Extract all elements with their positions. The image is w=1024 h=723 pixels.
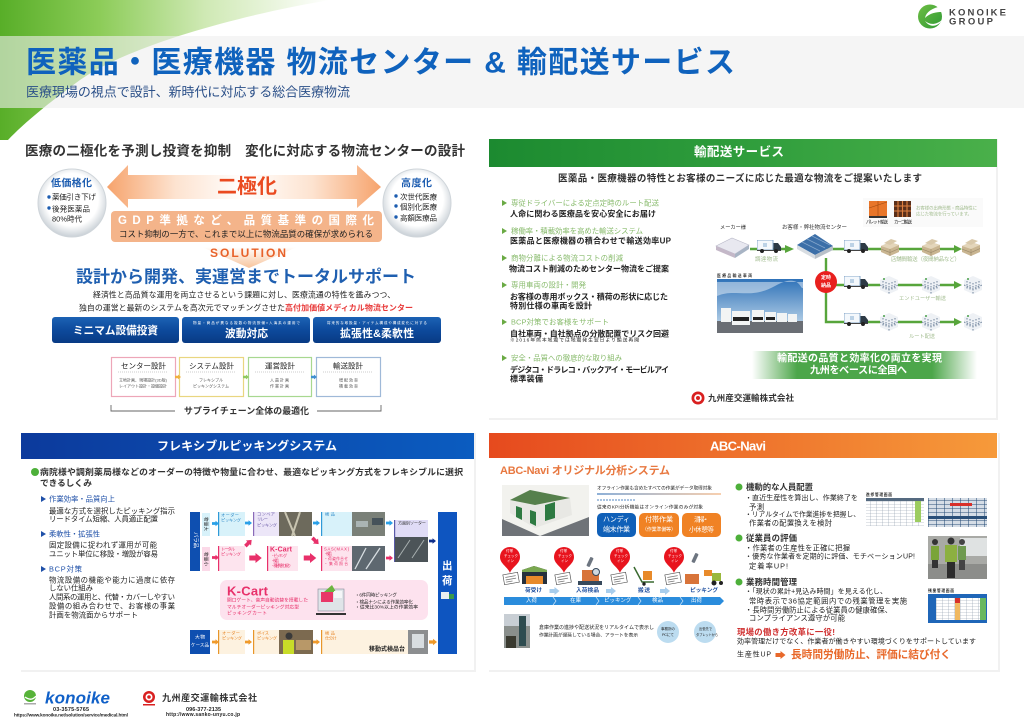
legend: pallet and cargo: 応じた物流を行っています。: [916, 210, 972, 218]
icon: forklift picking: [685, 553, 723, 586]
feature list: flexible staffing: ・直近生産性を算出し、作業終了を: [745, 493, 858, 502]
check-in pins: チェック: [614, 553, 628, 558]
benefit list: ユニット単位に移設・増設が容易: [49, 550, 158, 558]
chart thumbnail: daily progress table: 進捗管理画面: [866, 492, 892, 497]
K-Cart callout: ・検品ナシによる作業効率化: [355, 598, 413, 606]
panel: delivery service: [489, 139, 997, 404]
double arrow: polarization: 二極化: [217, 175, 277, 198]
row: small volume: SAS(MAX): [324, 546, 350, 552]
service list: [502, 198, 672, 384]
service list: 物流コスト削減のためセンター物流をご提案: [509, 264, 669, 274]
flow arrows: [212, 520, 437, 645]
service list: 特別仕様の車両を設計: [510, 300, 592, 310]
card: center design: [112, 358, 176, 396]
panel: logistics center design: [25, 142, 466, 416]
service list: 人命に関わる医療品を安心安全にお届け: [510, 208, 656, 218]
bubble: office PC: 事務所の: [661, 626, 675, 631]
panel: ABC-Navi: [489, 433, 997, 661]
bracket: supply chain optimisation: サプライチェーン全体の最適化: [184, 405, 309, 416]
route labels: [755, 255, 960, 340]
callout: GDP: [111, 211, 382, 242]
feature list: evaluation: [736, 533, 915, 570]
service list: 自社車両・自社拠点の分散配置でリスク回避: [510, 328, 669, 338]
pills: work categories: 端末作業: [603, 524, 630, 534]
benefit list: 人間系の運用と、代替・カバーしやすい: [49, 592, 175, 602]
double arrow: polarization: [107, 165, 381, 208]
footer: Kyushu Sanko: 096-377-2135: [186, 707, 221, 713]
pills: work categories: 清掃・: [694, 514, 709, 524]
process bar: 在庫: [570, 596, 582, 604]
bubble: tablet: 出張先で: [699, 626, 713, 631]
closing message: [737, 627, 976, 661]
feature list: working hours: ・「現状の累計+見込み時間」を見える化し、: [745, 586, 887, 596]
benefit list: 計画を物流面からサポート: [49, 610, 138, 620]
feature list: flexible staffing: ・リアルタイムで作業進捗を把握し、: [745, 510, 860, 518]
footer: Konoike: [14, 688, 128, 718]
route labels: 調達物流: [755, 255, 778, 263]
realtime text: 倉庫作業の進捗や配送状況をリアルタイムで表示し: [539, 624, 654, 631]
realtime text: 作業計画が遅延している場合、アラートを表示: [539, 632, 638, 638]
icons: destination buildings: [880, 276, 982, 331]
row: large case items: オーダー: [222, 630, 240, 636]
legend: pallet and cargo: お客様の出荷形態・商品特性に: [916, 204, 978, 212]
row: small volume: ・検品: [324, 551, 332, 556]
K-Cart callout: ・6件同時ピッキング: [355, 592, 397, 598]
picking flow chart: [190, 510, 457, 654]
service list: 標準装備: [510, 374, 543, 384]
feature list: flexible staffing: 作業者の配置換えを検討: [749, 518, 833, 528]
check-in pins: イン: [671, 559, 678, 563]
row: small volume: ・ピッキング: [271, 553, 287, 558]
callout: GDP: GDP準拠など、品質基準の国際化: [118, 213, 374, 227]
shipping column: [438, 512, 457, 654]
check-in pins: チェック: [668, 553, 682, 558]
photo: monitor: [504, 614, 530, 648]
feature list: evaluation: 従業員の評価: [746, 533, 797, 543]
card: system design: フレキシブル: [199, 376, 223, 382]
process bar: 出荷: [691, 596, 703, 604]
icon: hand cart: [634, 567, 654, 586]
shipping column: 出: [442, 559, 452, 572]
check-in pins: 付帯: [560, 548, 568, 553]
check-in pins: イン: [507, 559, 514, 563]
data scope lines: オフライン作業も含めたすべての作業がデータ取得対象: [597, 484, 712, 492]
icon: Kyushu Sanko logo: [143, 691, 155, 706]
connector arrows: [175, 375, 317, 379]
feature box: minimum investment: ミニマム設備投資: [73, 324, 158, 337]
row: large case items: 大物: [195, 634, 205, 640]
card: transport design: 輸送設計: [333, 360, 364, 370]
title: 医薬品・医療機器 物流センター & 輸配送サービス: [26, 46, 735, 80]
row: large case items: 検品: [325, 630, 335, 636]
card: operation design: 運営設計: [265, 360, 296, 370]
footer: Konoike: 03-3575-5765: [53, 707, 89, 713]
label: loose items: バラ品: [192, 532, 199, 548]
panel: flexible picking system: [21, 433, 474, 654]
footer: Konoike: konoike: [45, 688, 110, 708]
icon: K-Cart: [316, 585, 346, 615]
row: small volume: ・検品: [271, 558, 279, 563]
description text: 経済性と高品質な運用を両立させるという課題に対し、医療流通の特性を鑑みつつ、: [93, 290, 395, 300]
pills: work categories: 小休憩等: [689, 524, 714, 534]
benefit list: 固定設備に捉われず運用が可能: [49, 540, 158, 550]
icon: maker building: [716, 238, 749, 258]
subtitle: 医療現場の視点で設計、新時代に対応する総合医療物流: [26, 84, 350, 100]
right circle: advanced: 高額医療品: [400, 212, 437, 222]
feature box: scalability: 将来的な取扱量・アイテム構成や構成変化に対する: [327, 320, 427, 325]
left circle: low price: [38, 169, 106, 237]
label: loose items: 物量小: [202, 552, 210, 566]
feature list: working hours: 業務時間管理: [746, 577, 798, 587]
chart thumbnail: daily progress table: [866, 492, 924, 526]
background swoosh: [0, 0, 330, 140]
logo: Konoike Group: GROUP: [949, 16, 994, 28]
row: large volume: ピッキング: [221, 516, 241, 524]
check-in pins: イン: [561, 559, 568, 563]
benefit list: [41, 494, 176, 620]
label: loose items: [190, 512, 210, 571]
check-in pins: チェック: [558, 553, 572, 558]
benefit list: 柔軟性・拡張性: [49, 530, 100, 538]
left circle: low price: 薬価引き下げ: [52, 192, 96, 202]
service list: 専用車両の設計・開発: [511, 280, 587, 290]
badge: scheduled delivery: 定時: [821, 274, 831, 281]
row: large volume: コンベア: [257, 512, 275, 518]
lead text: 医薬品・医療機器の特性とお客様のニーズに応じた最適な物流をご提案いたします: [558, 172, 922, 184]
benefit list: BCP対策: [49, 564, 83, 574]
photo: truck fleet: 医療品輸送車両: [717, 273, 752, 278]
step labels: [525, 586, 718, 595]
benefit list: 作業効率・品質向上: [49, 494, 116, 504]
data scope lines: [597, 484, 721, 510]
row: large case items: ピッキング: [257, 634, 277, 642]
benefit list: しない仕組み: [49, 584, 93, 592]
check-in pins: 付帯: [670, 548, 678, 553]
banner: quality and efficiency: 九州をベースに全国へ: [810, 364, 907, 376]
benefit list: 物流設備の機能や能力に過度に依存: [49, 576, 176, 584]
row: small volume: トータル: [221, 546, 235, 552]
card: transport design: 積載効率: [339, 382, 358, 388]
realtime text: [539, 624, 654, 638]
feature box: wave response: [182, 317, 310, 343]
service list: ※2016年熊本地震では地震発生翌日より輸送再開: [510, 336, 639, 344]
footer: Kyushu Sanko: 九州産交運輸株式会社: [162, 692, 257, 703]
feature list: evaluation: ・作業者の生産性を正確に把握: [745, 544, 851, 552]
header: delivery service: 輸配送サービス: [694, 144, 784, 159]
row: large volume: ピッキング: [257, 522, 277, 528]
feature list: evaluation: ・優秀な作業者を定期的に評価、モチベーションUP!: [745, 552, 915, 560]
heading: total support: 設計から開発、実運営までトータルサポート: [76, 266, 416, 286]
row: small volume: ・積替先割り振り: [271, 563, 291, 568]
card: operation design: 人員計画: [270, 376, 289, 382]
closing message: 効率管理だけでなく、作業者が働きやすい環境づくりをサポートしています: [737, 636, 976, 646]
data scope lines: 従来のKPI分析機能はオンライン作業のみが対象: [597, 504, 703, 510]
feature box: scalability: [313, 317, 441, 343]
delivery flow diagram: [716, 223, 982, 340]
icons: store boxes: [881, 239, 980, 256]
lead text: [31, 466, 463, 488]
service list: 専従ドライバーによる定点定時のルート配送: [511, 198, 660, 208]
icon: inspection: [578, 557, 602, 585]
step labels: 入荷検品: [576, 586, 599, 594]
check-in pins: [500, 547, 684, 573]
benefit list: 最適な方式を選択したピッキング指示: [49, 506, 175, 516]
icons: trucks: [757, 240, 868, 326]
row: large case items: ボイス: [257, 630, 269, 636]
photo: staff: [928, 536, 987, 579]
row: small volume: ピッキング: [221, 550, 241, 558]
process bar: 検品: [652, 596, 664, 604]
right circle: advanced: 高度化: [401, 176, 432, 190]
check-in pins: イン: [617, 559, 624, 563]
row: large volume: 方面別ソーター: [398, 520, 426, 526]
check-in pins: 付帯: [506, 548, 514, 553]
shipping column: 荷: [442, 574, 453, 587]
lead text: できるしくみ: [40, 478, 92, 488]
row: large volume: 検品: [325, 510, 335, 518]
K-Cart callout: 開口ゲート、音声自動読替を搭載した: [227, 596, 308, 604]
card: system design: ピッキングシステム: [193, 382, 229, 388]
card: transport design: 増配効率: [339, 376, 358, 382]
step labels: ピッキング: [690, 586, 718, 594]
pills: work categories: （作業準備等）: [642, 526, 676, 533]
green route lines: [750, 245, 962, 326]
card: system design: システム設計: [189, 360, 234, 370]
row: large volume: オーダー: [221, 512, 239, 518]
company mark: Kyushu Sanko: [692, 392, 794, 404]
benefit list: 設備の組み合わせで、お客様の事業: [49, 602, 176, 610]
service list: 安全・品質への徹底的な取り組み: [511, 354, 622, 362]
card: operation design: [248, 358, 312, 396]
card: transport design: [316, 358, 380, 396]
icon: distribution center: [797, 234, 833, 259]
K-Cart callout: ・従来比30%以上の作業効率: [355, 604, 418, 610]
chart thumbnail: dashboard: [928, 498, 987, 527]
row: large case items: [190, 630, 428, 654]
feature list: working hours: コンプライアンス遵守が可能: [749, 614, 846, 622]
heading: analysis system: ABC-Navi オリジナル分析システム: [500, 463, 670, 477]
right circle: advanced: 次世代医療: [400, 192, 438, 202]
check-in pins: 付帯: [616, 548, 624, 553]
callout: GDP: コスト抑制の一方で、これまで以上に物流品質の確保が求められる: [119, 229, 373, 239]
feature list: working hours: ・長時間労働防止による従業員の健康確保、: [745, 606, 892, 614]
row: large volume: [218, 510, 428, 562]
header: flexible picking: フレキシブルピッキングシステム: [157, 438, 337, 453]
lead text: 病院様や調剤薬局様などのオーダーの特徴や物量に合わせ、最適なピッキング方式をフレキシブルに選択: [40, 466, 463, 477]
description text: 独自の運営と最新のシステムを高次元でマッチングさせた: [79, 302, 285, 312]
description text: 高付加価値メディカル物流センター: [285, 302, 413, 312]
row: small volume: ・荷姿作合せ: [324, 556, 348, 561]
bubble: office PC: PCにて: [662, 633, 674, 637]
feature list: flexible staffing: 予測: [749, 502, 764, 512]
feature list: evaluation: 定着率UP!: [749, 562, 788, 570]
image: warehouse building: [502, 485, 589, 536]
route labels: エンドユーザー輸送: [899, 294, 946, 302]
header band: [0, 36, 1024, 108]
legend: pallet and cargo: パレット輸送: [866, 218, 888, 226]
check-in cards: [503, 572, 681, 585]
footer: Kyushu Sanko: http://www.sanko-unyu.co.jp: [166, 712, 240, 718]
row: small volume: ・集荷照合: [324, 561, 348, 566]
bubble: office PC: [657, 621, 679, 643]
footer: Kyushu Sanko: [143, 691, 257, 718]
photo: truck fleet: [717, 273, 803, 333]
process icons: [522, 553, 723, 586]
feature box: minimum investment: [52, 317, 179, 343]
service list: 商物分離による物流コストの削減: [511, 254, 624, 262]
banner: quality and efficiency: [752, 351, 977, 379]
footer: Konoike: https://www.konoike.net/solution/service/medical.html: [14, 712, 128, 718]
card: center design: 立地計画、現場設計(3D版): [119, 376, 168, 382]
left circle: low price: 後発医薬品: [52, 204, 90, 214]
route labels: 店舗間輸送（夜間納品など）: [891, 255, 960, 263]
feature box: wave response: 波動対応: [225, 326, 268, 340]
K-Cart callout: [220, 580, 428, 620]
header: delivery service: [489, 139, 997, 167]
heading: center design: 医療の二極化を予測し投資を抑制 変化に対応する物流センターの設計: [25, 142, 466, 158]
logo: Konoike Group: [918, 4, 1006, 28]
row: large volume: リレー: [257, 516, 268, 522]
badge: scheduled delivery: [815, 271, 837, 293]
card: system design: [180, 358, 244, 396]
step labels: 荷受け: [525, 586, 542, 594]
row: large case items: ケース品: [191, 642, 210, 648]
label: loose items: 物量大: [202, 517, 210, 532]
process bar: 入荷: [526, 596, 538, 604]
row: large case items: ピッキング: [222, 634, 242, 642]
solution arrow: SOLUTION: [210, 246, 286, 260]
card: center design: レイアウト設計・設備設計: [119, 382, 167, 388]
legend: pallet and cargo: [863, 198, 983, 227]
feature list: flexible staffing: [736, 482, 860, 528]
bubble: tablet: [694, 621, 718, 643]
service list: お客様の専用ボックス・積荷の形状に応じた: [510, 292, 668, 302]
row: large case items: 仕分け: [325, 634, 337, 642]
bubble: tablet: タブレットから: [696, 632, 718, 637]
pills: work categories: ハンディ: [603, 514, 630, 524]
row: small volume: [218, 546, 385, 571]
icon: Konoike logo: [24, 690, 36, 704]
logo: Konoike Group: KONOIKE: [949, 8, 1006, 18]
feature list: flexible staffing: 機動的な人員配置: [746, 482, 814, 492]
feature box: scalability: 拡張性&柔軟性: [340, 326, 414, 340]
closing message: 現場の働き方改革に一役!: [737, 627, 835, 637]
pills: work categories: [597, 513, 721, 537]
feature list: working hours: [736, 577, 908, 622]
service list: デジタコ・ドラレコ・バックアイ・モービルアイ: [510, 364, 669, 374]
left circle: low price: 低価格化: [51, 176, 92, 190]
company mark: Kyushu Sanko: 九州産交運輸株式会社: [708, 393, 794, 403]
feature list: working hours: 常時表示で36協定範囲内での残業管理を実施: [749, 596, 908, 606]
delivery flow diagram: お客様・弊社物流センター: [782, 223, 847, 231]
delivery flow diagram: メーカー様: [720, 223, 747, 231]
K-Cart callout: マルチオーダーピッキング対応型: [227, 604, 299, 610]
icon: dock: [522, 566, 547, 584]
solution arrow: [202, 246, 297, 268]
check-in pins: チェック: [504, 553, 518, 558]
K-Cart callout: K-Cart: [227, 584, 269, 598]
left circle: low price: 80%時代: [52, 214, 82, 224]
service list: BCP対策でお客様をサポート: [511, 318, 609, 326]
K-Cart callout: ピッキングカート: [227, 610, 267, 616]
legend: pallet and cargo: カーゴ輸送: [894, 218, 912, 226]
chart thumbnail: overtime table: 残業管理画面: [928, 588, 954, 593]
step labels: 搬送: [638, 586, 650, 594]
route labels: ルート配送: [909, 332, 935, 340]
header: flexible picking: [21, 433, 474, 459]
card: operation design: 作業計画: [270, 382, 289, 388]
row: small volume: K-Cart: [270, 546, 293, 554]
row: large case items: 移動式検品台: [369, 645, 405, 653]
closing message: 長時間労働防止、評価に結び付く: [791, 648, 951, 661]
benefit list: リードタイム短縮、人員適正配置: [49, 514, 159, 524]
service list: 医薬品と医療機器の積合わせで輸送効率UP: [510, 236, 672, 246]
banner: quality and efficiency: 輸配送の品質と効率化の両立を実現: [777, 352, 942, 364]
chart thumbnail: overtime table: [928, 588, 987, 623]
card: center design: センター設計: [121, 360, 166, 370]
closing message: 生産性UP: [737, 650, 771, 658]
badge: scheduled delivery: 納品: [821, 282, 831, 289]
process bar: ピッキング: [604, 596, 632, 604]
service list: 稼働率・積載効率を高めた輸送システム: [511, 226, 643, 236]
process bar: [504, 596, 724, 605]
pills: work categories: 付帯作業: [645, 514, 673, 524]
description text: [79, 290, 413, 312]
header: ABC-Navi: ABC-Navi: [710, 438, 766, 454]
right circle: advanced: 個別化医療: [400, 202, 438, 212]
header: ABC-Navi: [489, 433, 997, 458]
feature box: wave response: 物量・商品が異なる複数の物流設備×人海系の運用で: [193, 320, 300, 325]
bracket: supply chain optimisation: [111, 405, 381, 416]
right circle: advanced: [383, 169, 451, 237]
